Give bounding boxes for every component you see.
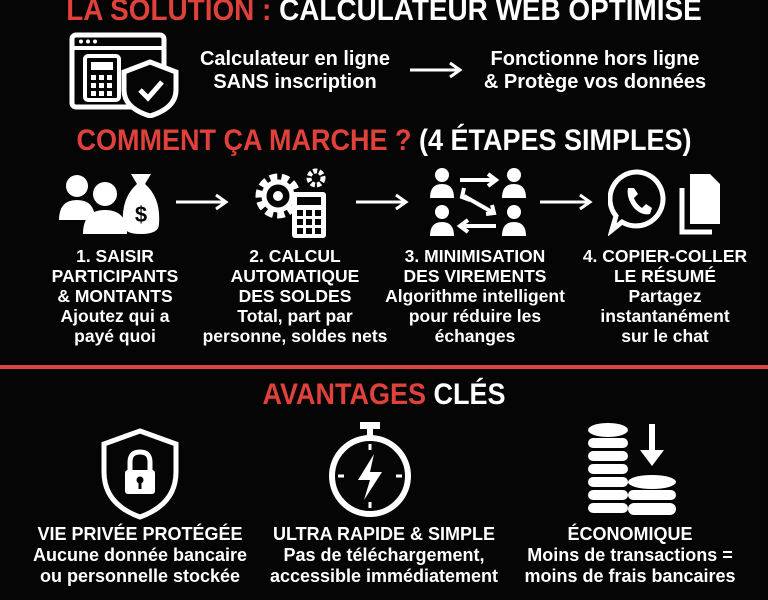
step 1 text: 1. SAISIR — [76, 246, 154, 266]
benefit 3 text — [524, 524, 736, 586]
icon: coin stacks with arrow — [588, 423, 676, 515]
text: online calculator — [200, 48, 390, 93]
step 2 text — [203, 246, 387, 346]
step 1 text — [52, 246, 178, 346]
benefit 3 text: ÉCONOMIQUE — [567, 524, 692, 544]
step 3 icon: people exchanging — [430, 168, 526, 236]
step 2 text: 2. CALCUL — [249, 246, 341, 266]
arrow — [540, 194, 592, 210]
step 3 text: échanges — [435, 326, 515, 346]
step 4 text: 4. COPIER-COLLER — [583, 246, 747, 266]
step 2 text: personne, soldes nets — [203, 326, 387, 346]
step 1 icon: people and money bag: $ — [135, 202, 147, 227]
arrow — [176, 194, 228, 210]
benefit 1 text: ou personnelle stockée — [40, 566, 240, 586]
step 4 text: instantanément — [600, 306, 730, 326]
heading: how it works: COMMENT ÇA MARCHE ? (4 ÉTAPES SIMPLES) — [76, 124, 692, 157]
step 1 icon: people and money bag — [59, 174, 160, 234]
step 1 text: & MONTANTS — [57, 286, 173, 306]
benefit 1 text — [33, 524, 247, 586]
step 3 text: Algorithme intelligent — [385, 286, 565, 306]
heading: key advantages: AVANTAGES CLÉS — [262, 378, 506, 411]
step 1 text: payé quoi — [74, 326, 156, 346]
step 2 icon: gears and calculator — [256, 168, 326, 238]
step 4 icon: chat and copy — [608, 170, 720, 236]
step 3 text — [385, 246, 565, 346]
step 3 text: DES VIREMENTS — [404, 266, 546, 286]
text: offline and protected: & Protège vos données — [484, 71, 706, 93]
benefit 1 text: Aucune donnée bancaire — [33, 545, 247, 565]
step 4 text: Partagez — [629, 286, 701, 306]
icon: stopwatch lightning — [329, 422, 411, 517]
arrow — [410, 62, 462, 78]
benefit 1 text: VIE PRIVÉE PROTÉGÉE — [37, 524, 243, 544]
step 4 text: sur le chat — [621, 326, 709, 346]
step 4 text: LE RÉSUMÉ — [614, 266, 716, 286]
text: online calculator: SANS inscription — [213, 71, 377, 93]
arrow — [356, 194, 408, 210]
benefit 2 text: ULTRA RAPIDE & SIMPLE — [273, 524, 495, 544]
text: online calculator: Calculateur en ligne — [200, 48, 390, 70]
benefit 2 text: Pas de téléchargement, — [283, 545, 485, 565]
benefit 2 text — [270, 524, 498, 586]
step 3 text: 3. MINIMISATION — [405, 246, 545, 266]
step 1 text: Ajoutez qui a — [61, 306, 169, 326]
step 1 text: PARTICIPANTS — [52, 266, 178, 286]
step 3 text: pour réduire les — [409, 306, 541, 326]
icon: shield lock — [102, 428, 178, 520]
step 2 text: AUTOMATIQUE — [231, 266, 359, 286]
step 2 text: DES SOLDES — [239, 286, 351, 306]
icon: browser calculator with shield — [70, 32, 178, 118]
text: offline and protected — [484, 48, 706, 93]
red divider — [0, 365, 768, 369]
step 2 text: Total, part par — [237, 306, 353, 326]
step 4 text — [583, 246, 747, 346]
benefit 3 text: moins de frais bancaires — [524, 566, 736, 586]
benefit 3 text: Moins de transactions = — [527, 545, 733, 565]
text: offline and protected: Fonctionne hors ligne — [491, 48, 699, 70]
benefit 2 text: accessible immédiatement — [270, 566, 498, 586]
